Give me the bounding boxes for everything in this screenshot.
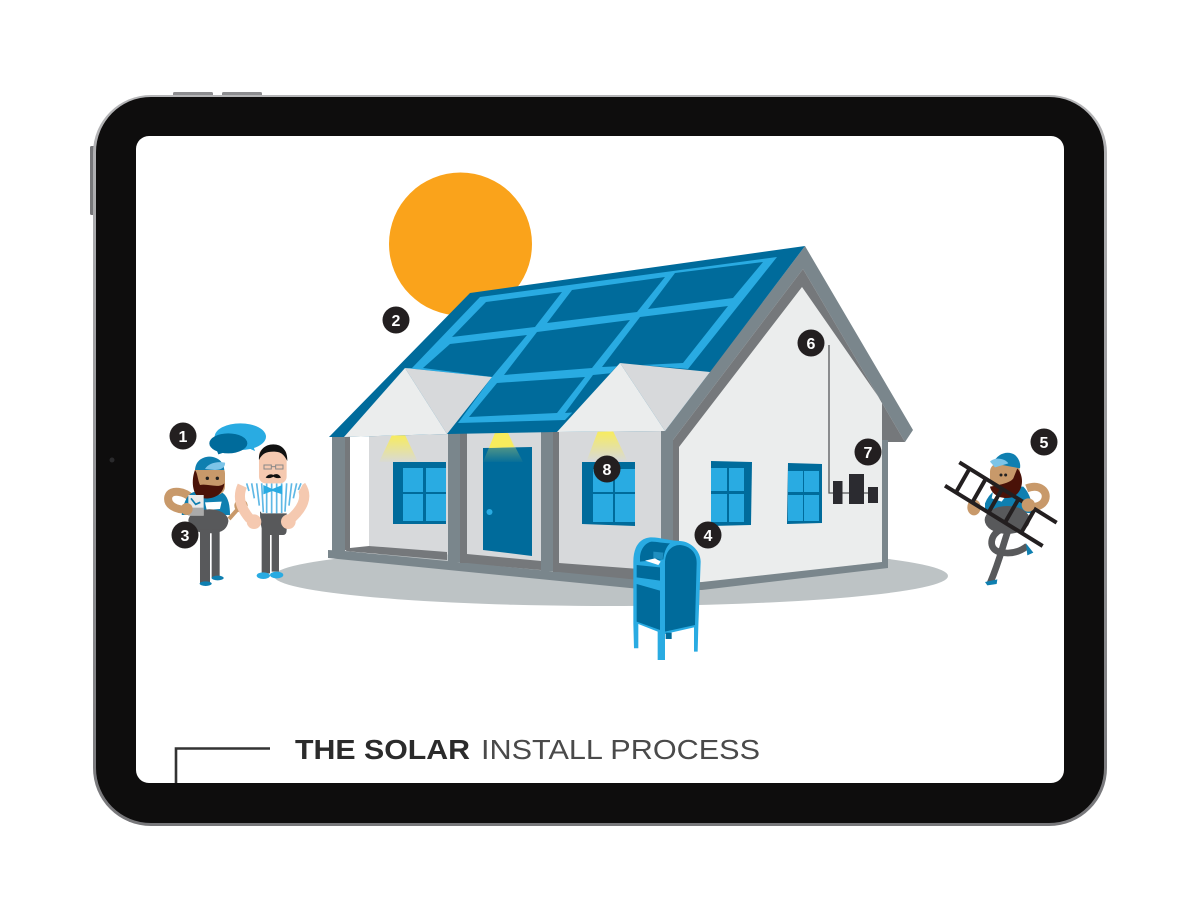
ladder [945, 462, 1057, 546]
badge 2 [382, 306, 410, 334]
side wall windows [711, 461, 822, 526]
installer with ladder [945, 453, 1057, 585]
solar panels [405, 257, 777, 423]
badge 6 [798, 330, 824, 356]
badge 7: 7 [864, 445, 873, 462]
badge 8 [594, 456, 620, 482]
left dormer [344, 368, 492, 437]
side wall base [640, 562, 888, 590]
porch floor [328, 546, 640, 589]
sun [389, 172, 532, 316]
title: INSTALL PROCESS [481, 734, 760, 765]
badge 8: 8 [603, 462, 612, 479]
window 1 [393, 462, 446, 524]
mailbox [633, 537, 701, 660]
corner bracket [176, 748, 270, 783]
porch lights [379, 431, 627, 462]
badge 7 [854, 438, 882, 466]
window 2 [582, 462, 635, 526]
porch posts [332, 430, 559, 572]
badge 3: 3 [181, 528, 190, 545]
badge 3 [172, 522, 198, 548]
badge 6: 6 [807, 336, 816, 353]
door [483, 433, 532, 556]
number badges [170, 306, 1058, 548]
porch back wall [369, 430, 665, 578]
title [295, 734, 760, 765]
roof [329, 246, 805, 437]
badge 1: 1 [179, 429, 188, 446]
tablet frame [90, 92, 1107, 826]
meter wiring and inverter boxes [829, 345, 878, 504]
house [274, 246, 948, 606]
side wall [679, 287, 882, 586]
gable frame [661, 246, 913, 586]
badge 5 [1030, 428, 1058, 456]
badge 4 [694, 522, 722, 548]
right dormer [557, 363, 710, 432]
installer with clipboard [168, 423, 266, 586]
badge 2: 2 [392, 313, 401, 330]
badge 1 [170, 422, 196, 450]
homeowner [240, 444, 304, 579]
title: THE SOLAR [295, 734, 470, 765]
ground shadow [274, 546, 948, 606]
badge 5: 5 [1040, 435, 1049, 452]
speech bubbles [209, 423, 266, 454]
badge 4: 4 [704, 528, 713, 545]
